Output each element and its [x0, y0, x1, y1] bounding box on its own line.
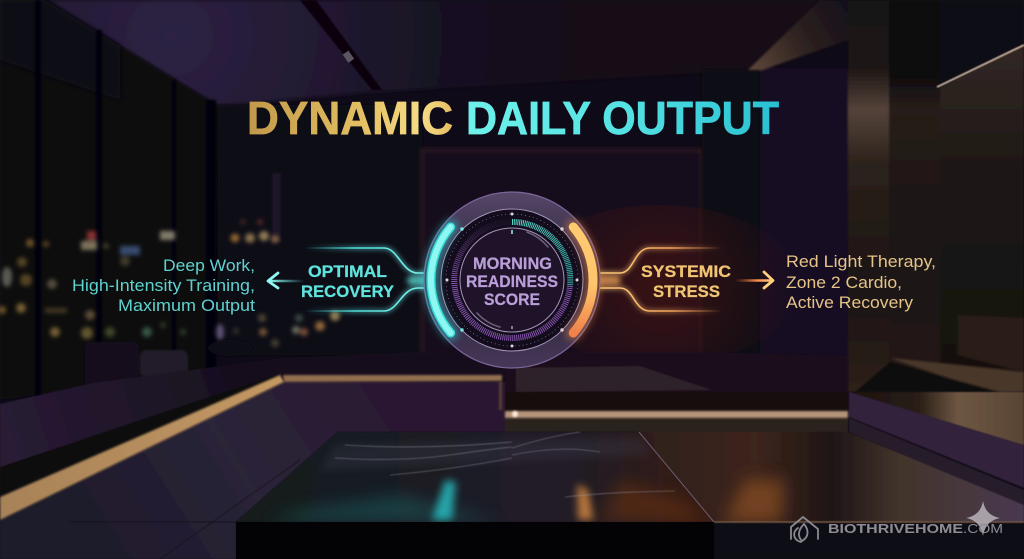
panel: LED floor strips: [0, 375, 848, 520]
panel: ambient glow behind stress branch: [520, 205, 800, 365]
text: stress outcomes: Active Recovery: [786, 293, 914, 312]
text: recovery outcomes: Maximum Output: [118, 296, 255, 315]
inner disc: [460, 228, 564, 332]
label: systemic stress: SYSTEMIC: [641, 262, 731, 281]
label: morning readiness score: READINESS: [466, 272, 558, 291]
text: site name: BIOTHRIVEHOME: [828, 521, 963, 536]
title: DAILY OUTPUT: [466, 92, 779, 144]
panel: marble table: [236, 432, 714, 559]
text: recovery outcomes: High-Intensity Training,: [72, 276, 255, 295]
label: systemic stress: STRESS: [653, 282, 720, 301]
panel: centre back wall: [422, 150, 702, 355]
arc: orange stress glow: [573, 227, 593, 333]
icon: house with leaf: [791, 517, 818, 542]
arrow: left to outcomes: [268, 273, 305, 288]
outer ring: [432, 200, 592, 360]
gauge band: teal progress: [512, 222, 570, 286]
title: [247, 92, 779, 144]
text: stress outcomes: Red Light Therapy,: [786, 252, 936, 271]
arrow: right to outcomes: [735, 272, 773, 288]
label: optimal recovery: OPTIMAL: [308, 262, 387, 281]
gauge band: purple progress: [454, 222, 570, 338]
panel: right wall: [748, 0, 1024, 398]
text: recovery outcomes: [72, 256, 255, 315]
label: optimal recovery: RECOVERY: [301, 282, 395, 301]
panel: floor: [0, 352, 1024, 559]
gauge: morning readiness dial: [424, 192, 600, 368]
label: optimal recovery: [301, 262, 395, 301]
icon: sparkle: [966, 501, 1000, 536]
text: recovery outcomes: Deep Work,: [163, 256, 255, 275]
label: morning readiness score: [466, 254, 558, 309]
text: stress outcomes: Zone 2 Cardio,: [786, 273, 902, 292]
tick nodes: [446, 212, 578, 348]
connector: systemic stress branch: [592, 248, 722, 311]
title: DYNAMIC: [247, 92, 453, 144]
connector: optimal recovery branch: [305, 248, 432, 311]
text: stress outcomes: [786, 252, 936, 312]
label: systemic stress: [641, 262, 731, 301]
icon: blurred city lights: [0, 219, 340, 347]
label: morning readiness score: SCORE: [484, 290, 540, 309]
watermark: BioThriveHome logo: [791, 501, 1000, 542]
icon: lounge furniture: [85, 340, 252, 388]
label: morning readiness score: MORNING: [473, 254, 552, 273]
arc: cyan recovery glow: [431, 227, 451, 333]
text: site suffix: .COM: [963, 521, 1003, 536]
panel: ceiling: [45, 0, 830, 106]
